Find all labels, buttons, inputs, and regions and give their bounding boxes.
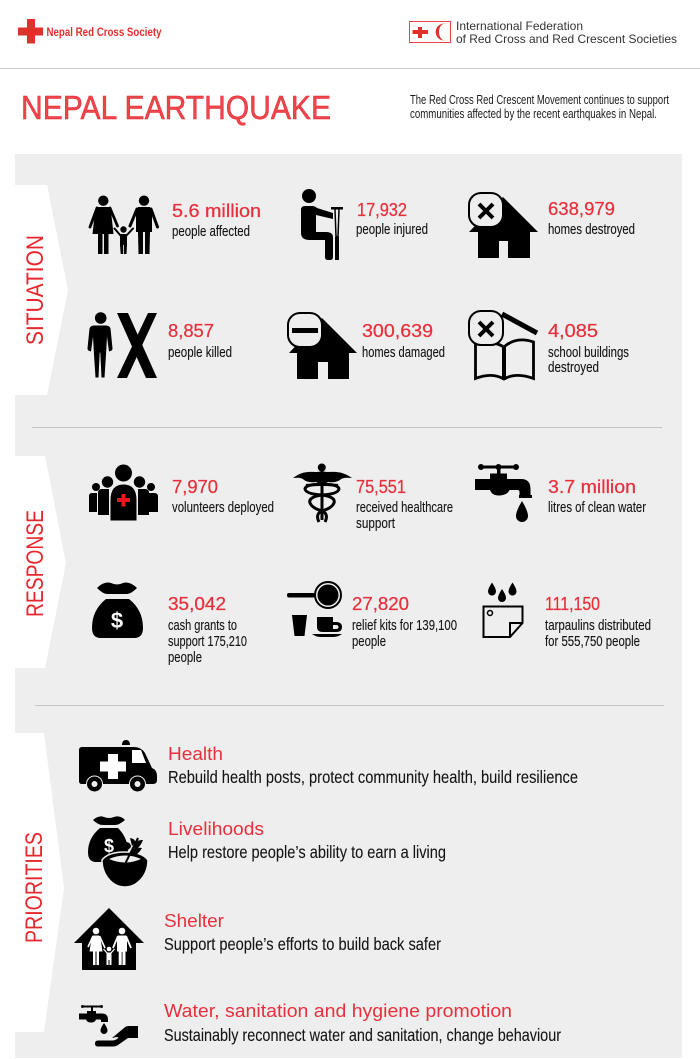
- panel: situation tab: [0, 185, 68, 395]
- stat: 3.7 million litres of clean water: [548, 477, 646, 516]
- stat: 638,979 homes destroyed: [548, 199, 635, 238]
- stat: 8,857 people killed: 8,857: [168, 321, 214, 341]
- priority: shelter: [164, 910, 441, 954]
- stat: 7,970 volunteers deployed: 7,970: [172, 477, 218, 497]
- stat: 17,932 people injured: people injured: [356, 221, 428, 238]
- icon: money bag: [92, 583, 143, 638]
- stat: 111,150 tarpaulins: 111,150: [545, 594, 600, 614]
- icon: ambulance: [79, 740, 157, 792]
- stat: 638,979 homes destroyed: 638,979: [548, 199, 615, 219]
- stat: 3.7 million litres of clean water: 3.7 million: [548, 477, 636, 497]
- stat: 35,042 cash grants: 35,042: [168, 594, 226, 614]
- priority: water, sanitation and hygiene promotion: Water, sanitation and hygiene promotion: [164, 1000, 512, 1021]
- icon: money bag: $: [111, 608, 123, 633]
- stat: 300,639 homes damaged: 300,639: [362, 321, 433, 341]
- icon: person and cross mark: [88, 312, 157, 378]
- stat: 35,042 cash grants: people: [168, 649, 202, 666]
- priority: water, sanitation and hygiene promotion: [164, 1000, 561, 1045]
- panel: response tab: [0, 456, 66, 668]
- icon: family: [90, 196, 158, 254]
- stat: 35,042 cash grants: cash grants to: [168, 617, 237, 634]
- stat: 638,979 homes destroyed: homes destroyed: [548, 221, 635, 238]
- icon: caduceus: [293, 464, 352, 522]
- logo: International Federation: International Federation: [456, 19, 583, 33]
- stat: 7,970 volunteers deployed: [172, 477, 274, 516]
- icon: home damaged: [288, 313, 357, 379]
- stat: 5.6 million people affected: 5.6 million: [172, 201, 261, 221]
- stat: 5.6 million people affected: [172, 201, 261, 240]
- priority: livelihoods: Help restore people’s ability to earn a living: [168, 842, 446, 862]
- stat: 4,085 school buildings destroyed: destroyed: [548, 359, 599, 376]
- panel: response tab: RESPONSE: [22, 510, 49, 617]
- stat: 35,042 cash grants: support 175,210: [168, 633, 247, 650]
- icon: tarpaulin and rain: [484, 582, 522, 637]
- stat: 111,150 tarpaulins: tarpaulins distributed: [545, 617, 651, 634]
- priority: livelihoods: Livelihoods: [168, 818, 264, 839]
- logo: Nepal Red Cross Society: Nepal Red Cross Society: [46, 27, 162, 39]
- stat: 4,085 school buildings destroyed: school buildings: [548, 344, 629, 361]
- priority: health: Health: [168, 743, 223, 764]
- icon: livelihoods: [88, 816, 148, 887]
- stat: 4,085 school buildings destroyed: [548, 321, 629, 376]
- stat: 27,820 relief kits: 27,820: [352, 594, 409, 614]
- stat: 75,551 received healthcare support: support: [356, 515, 396, 532]
- stat: 35,042 cash grants: [168, 594, 247, 666]
- stat: 111,150 tarpaulins: for 555,750 people: [545, 633, 640, 650]
- logo: International Federation: of Red Cross and Red Crescent Societies: [456, 32, 677, 46]
- stat: 300,639 homes damaged: [362, 321, 445, 361]
- stat: 4,085 school buildings destroyed: 4,085: [548, 321, 598, 341]
- stat: 8,857 people killed: [168, 321, 232, 361]
- logo: Nepal Red Cross Society: [18, 19, 162, 44]
- stat: 75,551 received healthcare support: 75,551: [356, 477, 406, 497]
- priority: shelter: Support people’s efforts to build back safer: [164, 934, 441, 954]
- priority: livelihoods: [168, 818, 446, 862]
- stat: 3.7 million litres of clean water: litres of clean water: [548, 499, 646, 516]
- logo: International Federation: [410, 19, 677, 46]
- stat: 111,150 tarpaulins: [545, 594, 651, 650]
- stat: 27,820 relief kits: people: [352, 633, 386, 650]
- panel: priorities tab: PRIORITIES: [21, 832, 48, 943]
- priority: health: Rebuild health posts, protect community health, build resilience: [168, 767, 578, 787]
- icon: school destroyed: [469, 311, 537, 380]
- priority: shelter: Shelter: [164, 910, 224, 931]
- stat: 75,551 received healthcare support: received healthcare: [356, 499, 453, 516]
- intro text: [410, 92, 669, 121]
- icon: livelihoods: $: [104, 836, 114, 856]
- title: NEPAL EARTHQUAKE: [21, 89, 331, 126]
- icon: injured person with crutch: [301, 189, 343, 260]
- priority: health: [168, 743, 578, 787]
- stat: 17,932 people injured: [356, 200, 428, 238]
- icon: home destroyed: [469, 193, 538, 258]
- panel: situation tab: SITUATION: [22, 235, 49, 345]
- stat: 27,820 relief kits: relief kits for 139,100: [352, 617, 457, 634]
- icon: water and hand: [79, 1005, 138, 1046]
- stat: 7,970 volunteers deployed: volunteers deployed: [172, 499, 274, 516]
- stat: 5.6 million people affected: people affected: [172, 223, 250, 240]
- icon: volunteers: [89, 464, 158, 521]
- icon: water tap: [475, 464, 532, 522]
- stat: 27,820 relief kits: [352, 594, 457, 650]
- panel: priorities tab: [0, 733, 64, 1032]
- icon: pan and cups: [287, 582, 342, 637]
- icon: shelter: [74, 908, 144, 970]
- stat: 8,857 people killed: people killed: [168, 344, 232, 361]
- stat: 300,639 homes damaged: homes damaged: [362, 344, 445, 361]
- stat: 75,551 received healthcare support: [356, 477, 453, 532]
- priority: water, sanitation and hygiene promotion: Sustainably reconnect water and sanitation, change behaviour: [164, 1025, 561, 1045]
- stat: 17,932 people injured: 17,932: [357, 200, 407, 220]
